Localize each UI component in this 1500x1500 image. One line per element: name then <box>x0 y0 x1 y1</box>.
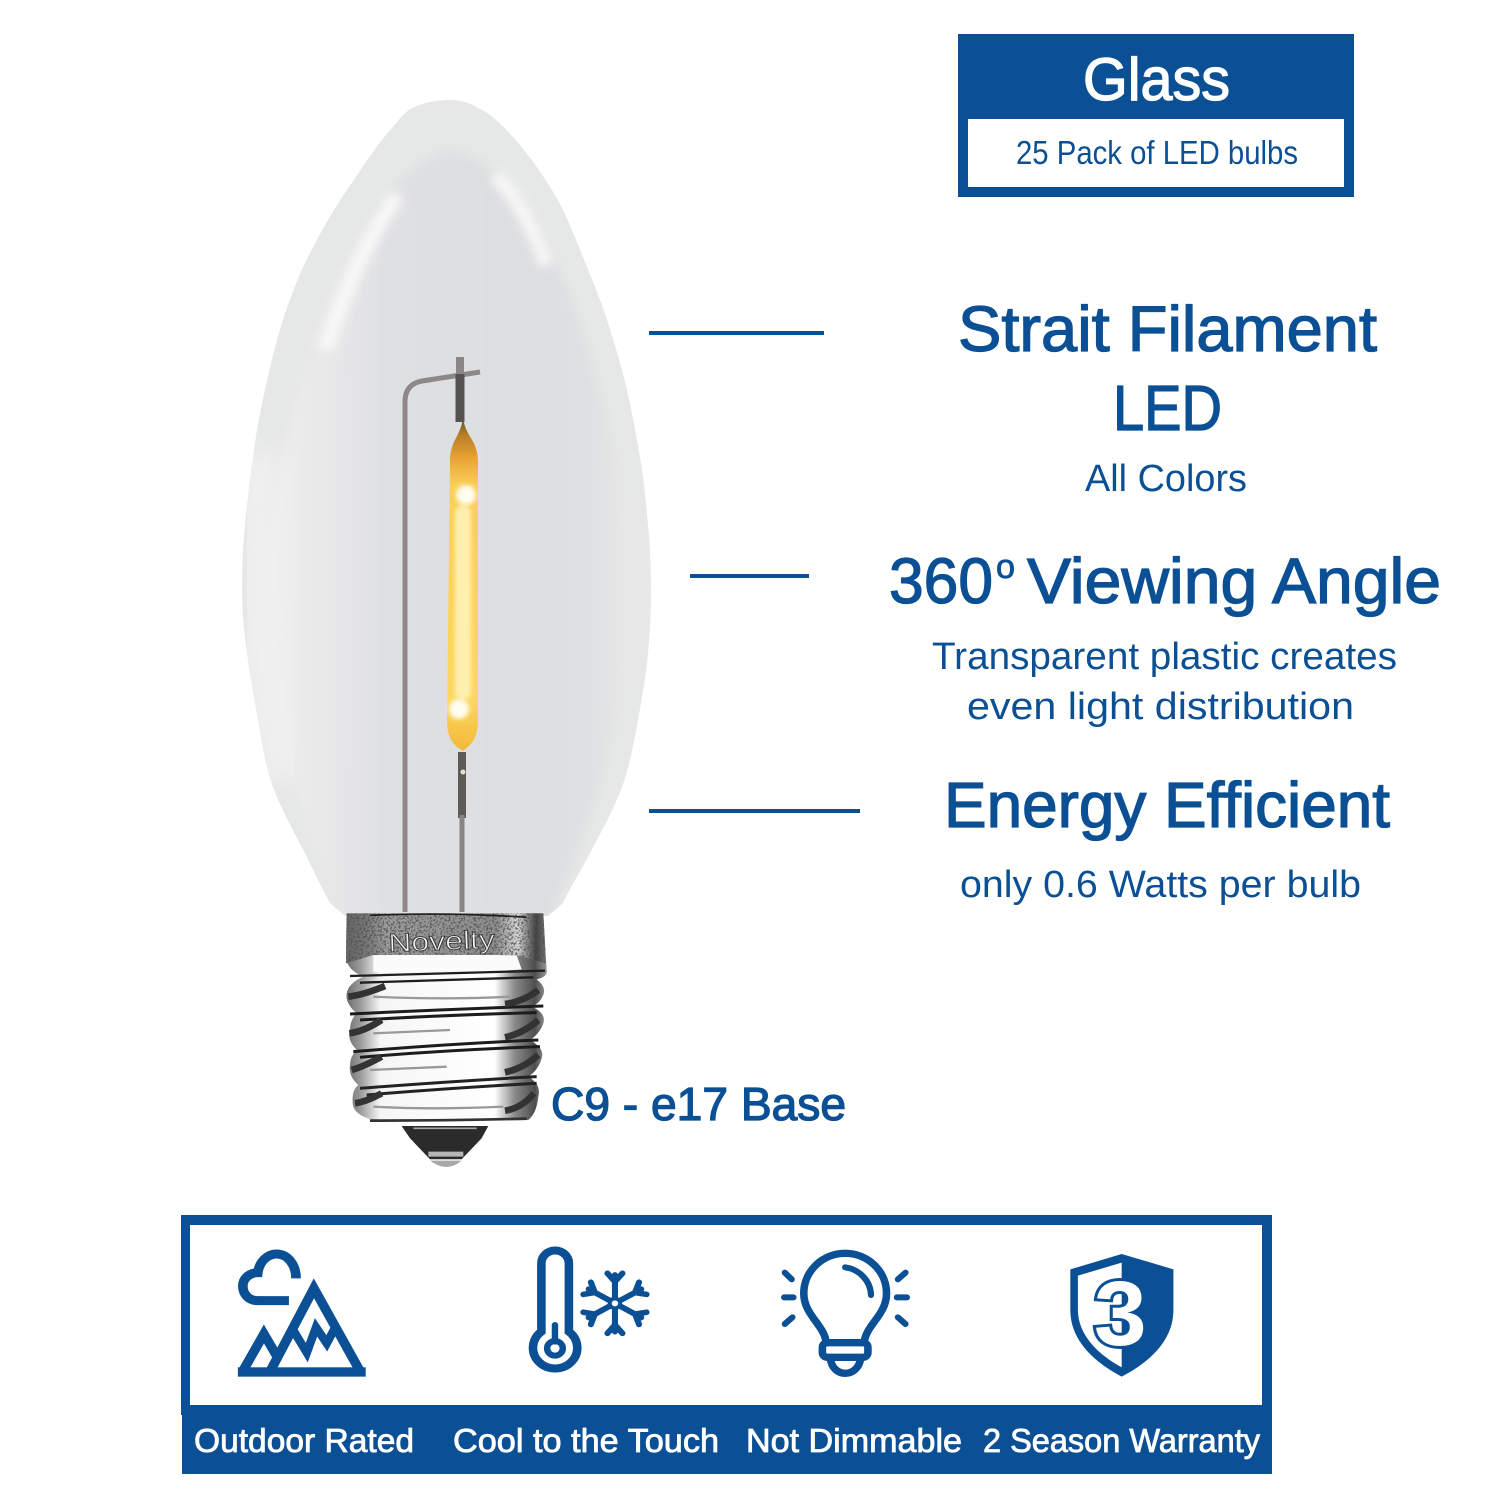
badge: Glass 25 pack <box>958 34 1354 197</box>
icon: warranty shield: 3 <box>1094 1262 1147 1365</box>
feature: energy efficient <box>944 769 1390 906</box>
label: outdoor rated: Outdoor Rated <box>194 1422 414 1459</box>
label: cool to the touch: Cool to the Touch <box>453 1422 719 1459</box>
glass envelope <box>230 90 670 920</box>
icon: warranty shield <box>1070 1254 1173 1377</box>
contact tip <box>402 1126 488 1167</box>
feature: energy efficient: only 0.6 Watts per bulb <box>960 864 1361 906</box>
callout line: filament <box>649 331 824 335</box>
callout line: viewing angle <box>690 574 809 578</box>
feature: Strait Filament LED: All Colors <box>1085 458 1247 500</box>
base label: C9 - e17 Base <box>551 1078 846 1130</box>
callout line: efficiency <box>649 809 860 813</box>
feature: 360 viewing angle: o <box>996 548 1015 586</box>
product photo: glass C9 bulb <box>230 90 670 920</box>
feature: Strait Filament LED: Strait Filament <box>958 293 1377 365</box>
filament bright core <box>449 485 476 719</box>
badge subtitle: 25 Pack of LED bulbs <box>1016 134 1298 171</box>
support wire <box>405 372 480 912</box>
metal e17 screw base <box>346 913 547 1167</box>
panel: feature strip <box>181 1215 1272 1474</box>
icon: thermometer and snowflake <box>533 1250 647 1369</box>
feature: energy efficient: Energy Efficient <box>944 769 1390 841</box>
feature: 360 viewing angle: Transparent plastic creates <box>932 636 1397 678</box>
feature: 360 viewing angle: even light distribution <box>967 686 1354 728</box>
feature: 360 viewing angle: 360 <box>889 545 993 617</box>
icon: light bulb <box>784 1253 907 1373</box>
badge title: Glass <box>1083 46 1230 113</box>
label: warranty: 2 Season Warranty <box>983 1422 1260 1459</box>
feature: Strait Filament LED: LED <box>1113 372 1222 444</box>
feature: 360 viewing angle <box>889 545 1441 728</box>
filament upper lead <box>456 374 464 422</box>
filament lower lead <box>458 752 466 818</box>
feature: Strait Filament LED <box>958 293 1377 500</box>
feature: 360 viewing angle: Viewing Angle <box>1027 545 1441 617</box>
glowing LED filament <box>447 418 478 751</box>
label: not dimmable: Not Dimmable <box>746 1422 962 1459</box>
embossed brand on collar: Novelty <box>388 924 495 958</box>
icon: cloud and mountains <box>238 1254 366 1377</box>
